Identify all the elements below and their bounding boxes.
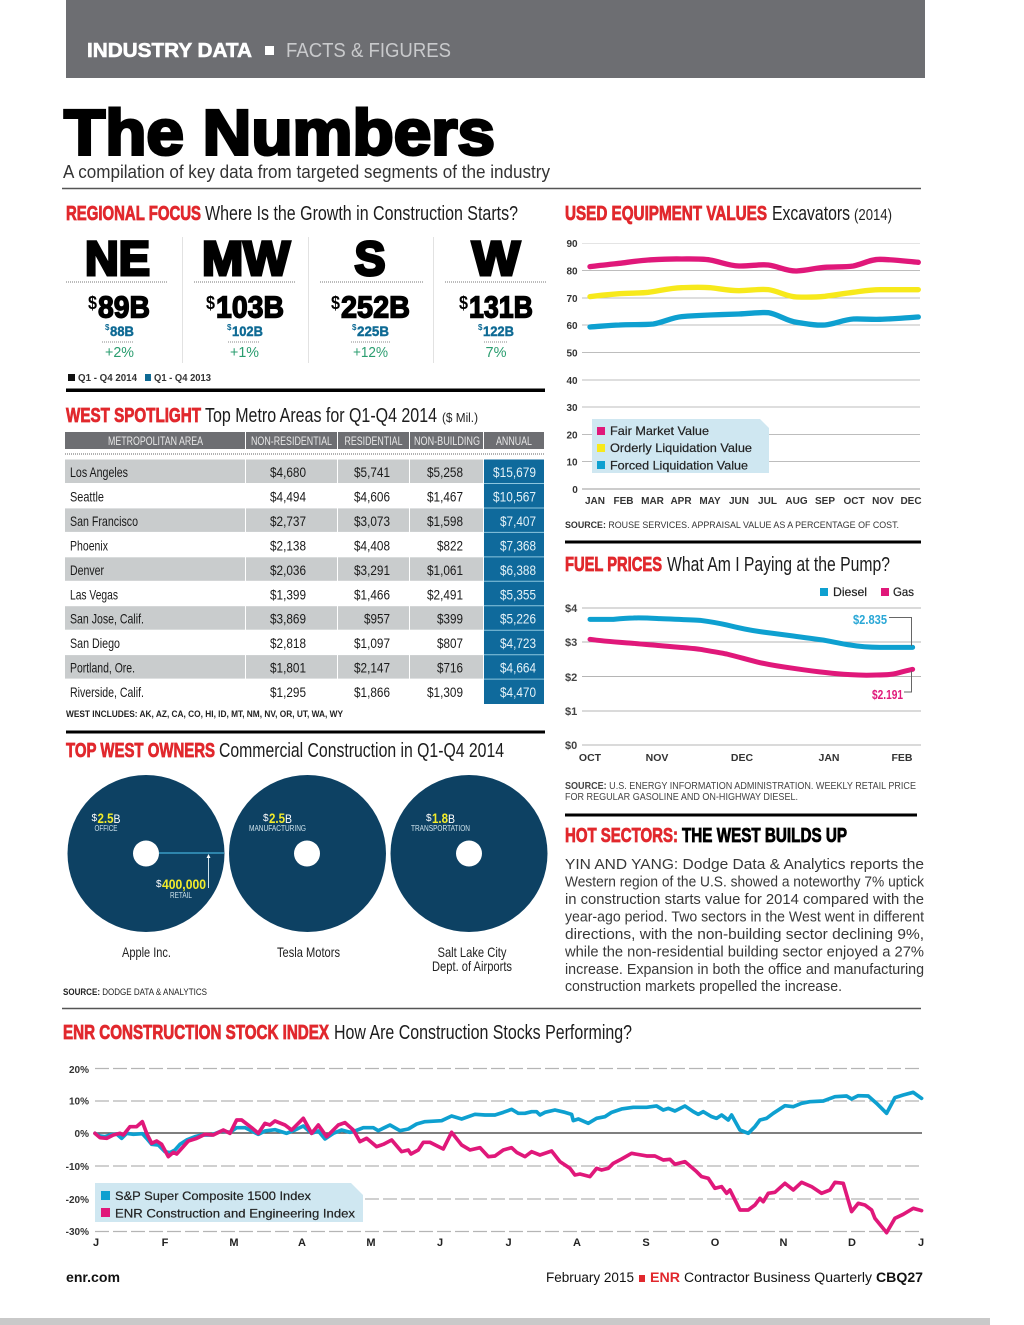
- table rows: $3,869: [270, 611, 306, 627]
- table rows: $5,741: [354, 464, 390, 480]
- table rows: $822: [437, 537, 463, 553]
- region: NE: 88B: [110, 323, 134, 339]
- donut: Apple Inc.: OFFICE: [94, 824, 118, 833]
- line chart: fuel prices: $0: [565, 740, 577, 752]
- heading: west spotlight: [66, 405, 478, 427]
- heading: west spotlight: Top Metro Areas for Q1-Q4 2014: [205, 405, 437, 427]
- legend: fuel: [820, 585, 914, 599]
- donut: Apple Inc.: [68, 775, 224, 960]
- region: MW: +1%: [230, 344, 259, 361]
- table rows: $4,408: [354, 537, 390, 553]
- line chart: stock index: 20%: [69, 1065, 89, 1076]
- line chart: stock index: -30%: [66, 1227, 89, 1238]
- line chart: fuel prices: $1: [565, 706, 577, 718]
- region: W: 122B: [483, 323, 514, 339]
- legend: equipment values: Forced Liquidation Value: [610, 458, 748, 472]
- table header: NON-BUILDING: [414, 434, 480, 448]
- region: NE: $: [88, 293, 97, 313]
- body text: construction markets propelled the increase.: [565, 978, 842, 995]
- panel: fuel prices: [565, 554, 921, 803]
- table rows: $4,664: [500, 660, 536, 676]
- region: S: +12%: [353, 344, 388, 361]
- region: S: $: [331, 293, 340, 313]
- heading: fuel prices: [565, 554, 890, 576]
- legend: stock index: ENR Construction and Engineering Index: [115, 1206, 355, 1220]
- line chart: excavator values: JUN: [729, 496, 749, 507]
- region: MW: $: [227, 323, 232, 332]
- body text: year-ago period. Two sectors in the West went in different: [565, 908, 925, 926]
- legend: stock index: S&P Super Composite 1500 Index: [115, 1189, 311, 1203]
- region: MW: $: [206, 293, 215, 313]
- table rows: $957: [364, 611, 390, 627]
- line chart: stock index: N: [780, 1237, 788, 1249]
- donut: Apple Inc.: $: [92, 813, 98, 824]
- region: NE: $: [105, 323, 110, 332]
- line chart: fuel prices: [565, 603, 921, 764]
- line chart: stock index: 10%: [69, 1096, 89, 1108]
- footer: Contractor Business Quarterly: [684, 1270, 872, 1285]
- table rows: $716: [437, 660, 463, 676]
- table rows: $4,723: [500, 635, 536, 651]
- line chart: stock index: O: [711, 1237, 720, 1249]
- line chart: fuel prices: JAN: [818, 752, 840, 764]
- table rows: $2,036: [270, 562, 306, 578]
- table header: METROPOLITAN AREA: [108, 434, 203, 448]
- table rows: $1,061: [427, 562, 463, 578]
- panel: west spotlight table: [65, 405, 544, 719]
- line chart: fuel prices: $2.191: [872, 687, 903, 702]
- footer: ENR: [650, 1270, 680, 1285]
- header banner: FACTS & FIGURES: [286, 40, 451, 62]
- table header: NON-RESIDENTIAL: [251, 434, 332, 448]
- header banner: [66, 0, 925, 78]
- line chart: excavator values: MAY: [699, 496, 721, 507]
- table rows: San Diego: [70, 635, 120, 651]
- line chart: stock index: M: [366, 1237, 376, 1249]
- table rows: San Francisco: [70, 513, 138, 529]
- donut: Salt Lake City Dept. of Airports: 1.8: [432, 810, 448, 826]
- donut: Apple Inc.: B: [114, 812, 120, 826]
- panel: hot sectors: [564, 825, 925, 995]
- region: W: $: [459, 293, 468, 313]
- heading: top west owners: Commercial Construction in Q1-Q4 2014: [219, 740, 504, 762]
- region: MW: 102B: [232, 323, 263, 339]
- table rows: $1,467: [427, 488, 463, 504]
- line chart: excavator values: OCT: [843, 496, 865, 507]
- line chart: excavator values: 60: [566, 321, 578, 332]
- line chart: excavator values: 90: [566, 239, 578, 250]
- donut: Salt Lake City Dept. of Airports: $: [426, 813, 432, 824]
- donut: Apple Inc.: 2.5: [98, 810, 114, 826]
- table rows: $1,866: [354, 684, 390, 700]
- body text: YIN AND YANG: Dodge Data & Analytics reports the: [565, 856, 924, 873]
- donut: Apple Inc.: RETAIL: [170, 891, 192, 900]
- table note: WEST INCLUDES: AK, AZ, CA, CO, HI, ID, MT, NM, NV, OR, UT, WA, WY: [66, 709, 343, 719]
- line chart: excavator values: 0: [572, 485, 578, 496]
- line chart: stock index: [66, 1065, 924, 1249]
- heading: west spotlight: ($ Mil.): [442, 410, 478, 425]
- line chart: stock index: -10%: [66, 1162, 89, 1173]
- region: W: 131B: [469, 290, 533, 324]
- source: rouse: SOURCE: ROUSE SERVICES. APPRAISAL VALUE AS A PERCENTAGE OF COST.: [565, 520, 899, 531]
- line chart: stock index: J: [505, 1237, 512, 1249]
- line chart: excavator values: AUG: [785, 496, 808, 507]
- table rows: $1,466: [354, 586, 390, 602]
- line chart: excavator values: 30: [566, 403, 578, 414]
- legend: quarters: [68, 373, 211, 384]
- heading: regional focus: [66, 203, 518, 225]
- table rows: $1,309: [427, 684, 463, 700]
- body text: [564, 856, 925, 995]
- heading: hot sectors: [565, 825, 847, 847]
- heading: used equipment values: (2014): [854, 207, 892, 224]
- heading: used equipment values: Excavators: [772, 203, 850, 225]
- donut: Apple Inc.: Apple Inc.: [122, 944, 171, 960]
- region: S: 252B: [341, 290, 410, 324]
- table rows: [65, 459, 544, 704]
- donut: Salt Lake City Dept. of Airports: Salt Lake City: [438, 944, 506, 960]
- region: MW: 103B: [216, 290, 284, 324]
- legend: stock index: [95, 1183, 363, 1222]
- table rows: Seattle: [70, 488, 104, 504]
- table rows: $4,680: [270, 464, 306, 480]
- line chart: fuel prices: NOV: [646, 752, 668, 764]
- panel: ENR construction stock index: [63, 1022, 924, 1249]
- line chart: stock index: A: [298, 1237, 306, 1249]
- region: MW: MW: [202, 233, 291, 286]
- table rows: $7,407: [500, 513, 536, 529]
- line chart: fuel prices: DEC: [731, 752, 754, 764]
- line chart: stock index: J: [93, 1237, 99, 1249]
- table rows: $4,606: [354, 488, 390, 504]
- table rows: $1,598: [427, 513, 463, 529]
- subtitle: A compilation of key data from targeted segments of the industry: [63, 162, 550, 182]
- table rows: $15,679: [493, 464, 536, 480]
- line chart: fuel prices: $2.835: [853, 612, 887, 627]
- legend: quarters: Q1 - Q4 2014: [78, 373, 137, 384]
- line chart: stock index: 0%: [75, 1129, 89, 1140]
- line chart: stock index: D: [848, 1237, 856, 1249]
- table rows: $1,097: [354, 635, 390, 651]
- line chart: stock index: A: [573, 1237, 581, 1249]
- line chart: stock index: F: [162, 1237, 169, 1249]
- heading: hot sectors: HOT SECTORS:: [565, 825, 678, 847]
- table rows: $3,291: [354, 562, 390, 578]
- region: NE: +2%: [105, 344, 134, 361]
- heading: stock index: ENR CONSTRUCTION STOCK INDEX: [63, 1022, 329, 1044]
- footer: [66, 1270, 923, 1285]
- line chart: excavator values: 80: [566, 266, 578, 278]
- body text: while the non-residential building sector enjoyed a 27%: [564, 944, 924, 960]
- line chart: excavator values: SEP: [815, 496, 835, 507]
- heading: stock index: How Are Construction Stocks Performing?: [334, 1022, 632, 1044]
- footer: CBQ27: [876, 1270, 923, 1285]
- source: eia: [565, 781, 916, 803]
- table rows: $2,147: [354, 660, 390, 676]
- line chart: excavator values: DEC: [900, 496, 922, 507]
- footer: February 2015: [546, 1270, 634, 1285]
- region: NE: NE: [85, 233, 150, 286]
- header banner: INDUSTRY DATA: [87, 40, 252, 62]
- panel: used equipment values: [565, 203, 922, 531]
- line chart: stock index: M: [229, 1237, 239, 1249]
- donut: Tesla Motors: $: [263, 813, 269, 824]
- table rows: $2,737: [270, 513, 306, 529]
- donut: Tesla Motors: 2.5: [269, 810, 285, 826]
- table rows: $5,355: [500, 586, 536, 602]
- line chart: fuel prices: $4: [565, 603, 578, 615]
- donut: Apple Inc.: $: [156, 879, 162, 890]
- donut: Tesla Motors: MANUFACTURING: [249, 824, 306, 833]
- table rows: $1,399: [270, 586, 306, 602]
- table rows: $6,388: [500, 562, 536, 578]
- line chart: stock index: -20%: [66, 1195, 89, 1206]
- table rows: $5,226: [500, 611, 536, 627]
- region: W: $: [478, 323, 483, 332]
- heading: west spotlight: WEST SPOTLIGHT: [66, 405, 201, 427]
- table rows: $1,295: [270, 684, 306, 700]
- body text: in construction starts value for 2014 compared with the: [565, 891, 924, 908]
- footer: enr.com: [66, 1270, 120, 1285]
- title: The Numbers: [64, 96, 495, 168]
- line chart: fuel prices: OCT: [579, 752, 602, 764]
- table rows: $2,138: [270, 537, 306, 553]
- table rows: $4,470: [500, 684, 536, 700]
- table rows: Phoenix: [70, 537, 108, 553]
- table rows: Las Vegas: [70, 586, 118, 602]
- donut: Salt Lake City Dept. of Airports: Dept. of Airports: [432, 958, 512, 974]
- region: S: 225B: [357, 323, 389, 339]
- line chart: excavator values: 70: [566, 294, 578, 305]
- table rows: $4,494: [270, 488, 306, 504]
- heading: regional focus: Where Is the Growth in Construction Starts?: [205, 203, 518, 225]
- line chart: excavator values: FEB: [614, 496, 634, 507]
- heading: stock index: [63, 1022, 632, 1044]
- line chart: excavator values: 10: [566, 458, 578, 468]
- line chart: excavator values: APR: [670, 496, 692, 507]
- region: W: 7%: [486, 344, 506, 361]
- table rows: $10,567: [493, 488, 536, 504]
- table rows: $2,818: [270, 635, 306, 651]
- heading: regional focus: REGIONAL FOCUS: [66, 203, 201, 225]
- panel: regional focus: [66, 203, 546, 384]
- table rows: $399: [437, 611, 463, 627]
- region: S: [320, 233, 423, 361]
- table rows: Riverside, Calif.: [70, 684, 144, 700]
- region: W: W: [472, 233, 521, 286]
- table rows: $3,073: [354, 513, 390, 529]
- body text: Western region of the U.S. showed a noteworthy 7% uptick: [565, 874, 924, 890]
- table rows: Portland, Ore.: [70, 660, 135, 676]
- region: NE: 89B: [98, 290, 150, 324]
- table rows: $7,368: [500, 537, 536, 553]
- table rows: $1,801: [270, 660, 306, 676]
- heading: fuel prices: FUEL PRICES: [565, 554, 662, 576]
- region: S: S: [354, 233, 386, 286]
- donut: Tesla Motors: Tesla Motors: [277, 944, 340, 960]
- region: MW: [194, 233, 295, 361]
- table header: ANNUAL: [496, 434, 532, 448]
- panel: top west owners: [63, 740, 548, 997]
- heading: top west owners: TOP WEST OWNERS: [66, 740, 215, 762]
- body text: directions, with the non-building sector declining 9%,: [565, 926, 924, 943]
- table rows: $2,491: [427, 586, 463, 602]
- table rows: $807: [437, 635, 463, 651]
- heading: top west owners: [66, 740, 504, 762]
- line chart: excavator values: 20: [566, 430, 578, 442]
- line chart: fuel prices: FEB: [892, 752, 913, 764]
- donut: Tesla Motors: [229, 775, 386, 960]
- legend: equipment values: Orderly Liquidation Value: [610, 441, 752, 455]
- region: W: [445, 233, 546, 361]
- table rows: $5,258: [427, 464, 463, 480]
- source: dodge: SOURCE: DODGE DATA & ANALYTICS: [63, 987, 207, 997]
- line chart: excavator values: [566, 239, 922, 507]
- table rows: Denver: [70, 562, 104, 578]
- line chart: stock index: S: [642, 1237, 650, 1249]
- line chart: excavator values: JUL: [758, 496, 777, 507]
- line chart: excavator values: 40: [566, 376, 578, 387]
- heading: hot sectors: THE WEST BUILDS UP: [682, 825, 847, 847]
- donut: Salt Lake City Dept. of Airports: [390, 775, 548, 974]
- line chart: excavator values: NOV: [872, 496, 894, 507]
- source: eia: SOURCE: U.S. ENERGY INFORMATION ADMINISTRATION. WEEKLY RETAIL PRICE: [565, 781, 916, 792]
- line chart: stock index: J: [918, 1237, 924, 1249]
- legend: fuel: Diesel: [833, 585, 867, 599]
- donut: Apple Inc.: 400,000: [162, 876, 206, 892]
- heading: used equipment values: USED EQUIPMENT VALUES: [565, 203, 767, 225]
- table rows: Los Angeles: [70, 464, 128, 480]
- donut: Salt Lake City Dept. of Airports: TRANSPORTATION: [411, 824, 470, 833]
- line chart: excavator values: JAN: [585, 496, 605, 507]
- body text: increase. Expansion in both the office and manufacturing: [565, 961, 924, 978]
- legend: quarters: Q1 - Q4 2013: [154, 373, 211, 384]
- line chart: fuel prices: $3: [565, 637, 577, 649]
- legend: equipment values: [592, 419, 769, 473]
- heading: fuel prices: What Am I Paying at the Pump?: [667, 554, 890, 576]
- table header: [65, 432, 544, 454]
- line chart: fuel prices: $2: [565, 672, 577, 684]
- table rows: San Jose, Calif.: [70, 611, 144, 627]
- table header: RESIDENTIAL: [344, 434, 403, 448]
- region: S: $: [352, 323, 357, 332]
- line chart: excavator values: MAR: [641, 496, 665, 507]
- line chart: excavator values: 50: [566, 348, 578, 360]
- region: NE: [66, 233, 167, 361]
- line chart: stock index: J: [437, 1237, 443, 1249]
- legend: fuel: Gas: [893, 585, 914, 599]
- legend: equipment values: Fair Market Value: [610, 424, 709, 438]
- source: eia: FOR REGULAR GASOLINE AND ON-HIGHWAY DIESEL.: [565, 792, 798, 803]
- donut: Salt Lake City Dept. of Airports: B: [448, 812, 455, 826]
- donut: Tesla Motors: B: [285, 812, 292, 826]
